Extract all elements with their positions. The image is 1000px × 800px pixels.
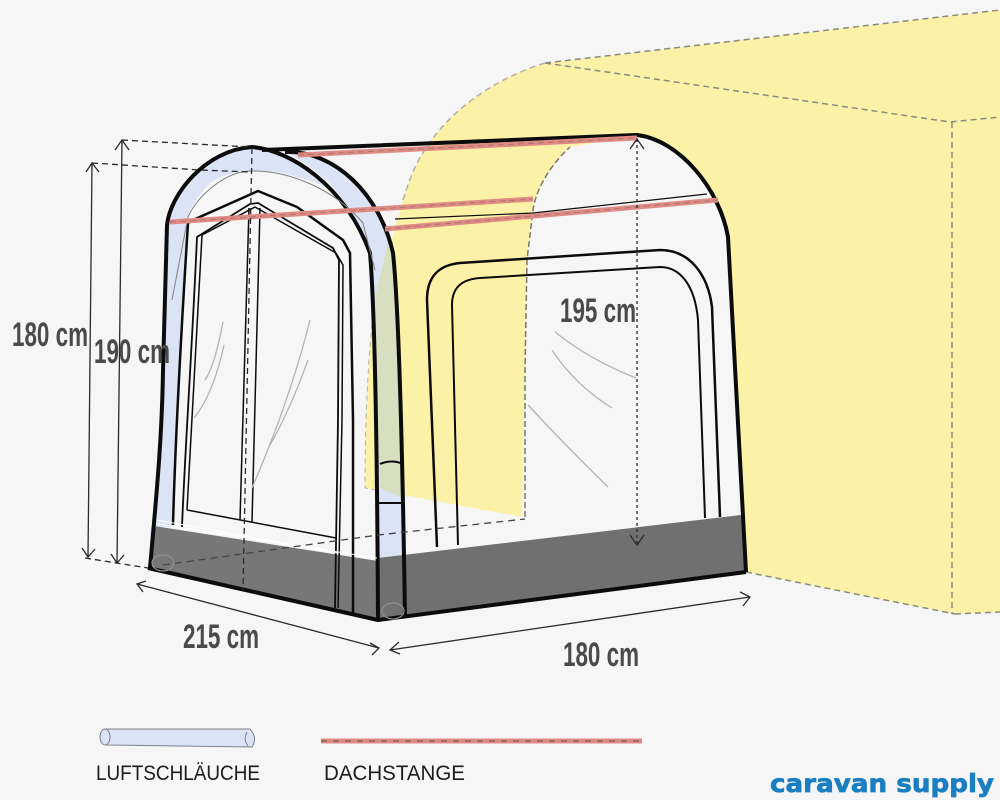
- tent front panel: [150, 147, 378, 620]
- label: 180 cm depth: 180 cm: [563, 636, 639, 674]
- tube end circles: [152, 555, 404, 619]
- tent interior clear area: [365, 135, 741, 560]
- legend label: Luftschläuche: LUFTSCHLÄUCHE: [96, 762, 260, 785]
- air tube front: [150, 147, 340, 568]
- label: 215 cm width: 215 cm: [183, 618, 259, 656]
- label: 180 cm height: 180 cm: [12, 316, 88, 354]
- air tube side: [285, 152, 405, 620]
- dimension lines: [82, 139, 750, 655]
- tube over vehicle tint: [375, 243, 402, 498]
- logo: caravan supply: [770, 769, 994, 798]
- vehicle seen through front panel: [365, 297, 376, 490]
- legend label: Dachstange: DACHSTANGE: [324, 762, 465, 785]
- legend icon: air tube: [100, 729, 255, 747]
- door frame lines: [173, 191, 353, 613]
- tent outline: [148, 135, 746, 620]
- floor band right: [378, 515, 746, 620]
- floor band left: [148, 526, 378, 620]
- vehicle arch dashed outline: [525, 147, 570, 517]
- legend icon: roof pole: [321, 738, 642, 744]
- inner tube edge: [172, 171, 375, 300]
- label: 195 cm height: 195 cm: [560, 292, 636, 330]
- label: 190 cm height: 190 cm: [94, 333, 170, 371]
- roof poles: [170, 138, 718, 229]
- vehicle silhouette: [365, 10, 1000, 614]
- right window lines: [427, 250, 720, 547]
- window creases: [194, 320, 636, 488]
